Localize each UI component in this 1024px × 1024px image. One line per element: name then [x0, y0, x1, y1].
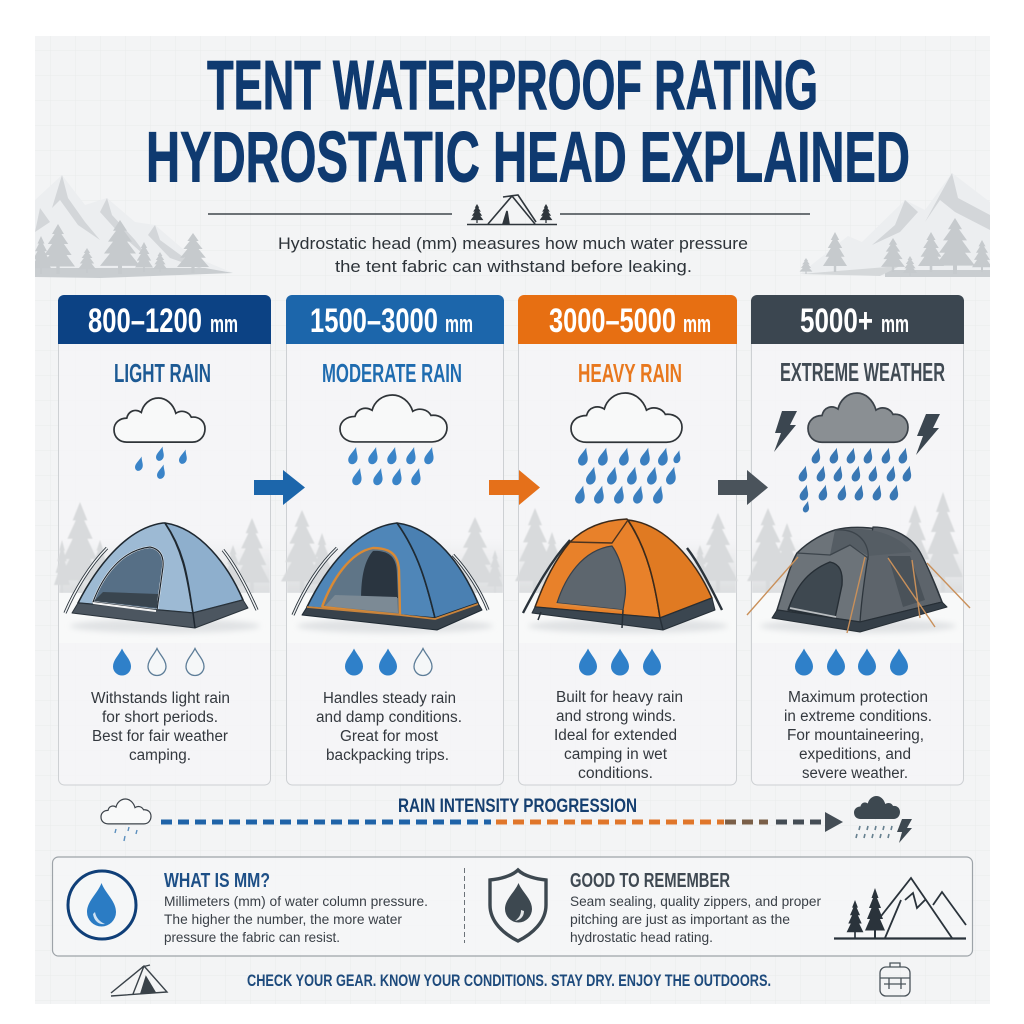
description: Best for fair weather: [92, 728, 228, 745]
background trees: [54, 502, 270, 594]
icon: light rain drops: [135, 446, 187, 479]
description: severe weather.: [802, 765, 908, 782]
arrow: blue: [254, 470, 305, 505]
tent: blue: [293, 523, 488, 630]
icon: backpack: [880, 963, 910, 996]
icon: water drop in circle: [68, 871, 136, 939]
tent: grey expedition: [747, 527, 970, 633]
heading: progression: RAIN INTENSITY PROGRESSION: [398, 796, 637, 817]
panel: heavy rain: [515, 295, 738, 785]
description: For mountaineering,: [787, 727, 924, 744]
description: camping in wet: [564, 746, 668, 763]
header: 800-1200 mm: mm: [210, 311, 238, 338]
background trees: [515, 508, 738, 594]
ground shadow: [760, 619, 956, 633]
heading: light rain: LIGHT RAIN: [114, 358, 211, 388]
arrow: grey: [718, 470, 768, 505]
info panel: [52, 857, 972, 956]
ground shadow: [70, 619, 260, 633]
icon: mountains and trees: [834, 878, 966, 938]
background trees: [747, 492, 963, 594]
section: what is mm: Millimeters (mm) of water column pressure.: [164, 893, 428, 909]
section: good to remember: hydrostatic head rating.: [570, 929, 713, 945]
snowy ground: [287, 593, 503, 643]
icon: lightning right: [916, 414, 940, 455]
header: 1500-3000 mm: 1500–3000: [310, 302, 438, 340]
description: [316, 690, 462, 764]
heading: heavy rain: HEAVY RAIN: [578, 358, 682, 388]
rating: four drops: [795, 648, 908, 676]
icon: small tent with trees: [467, 195, 557, 224]
header: 1500-3000 mm: mm: [445, 311, 473, 338]
icon: storm cloud with heavy rain: [854, 796, 912, 843]
icon: outline cloud: [571, 393, 682, 442]
icon: storm cloud: [808, 393, 908, 442]
header: 5000+ mm: [751, 295, 964, 344]
icon: extreme rain drops: [799, 448, 911, 512]
section: what is mm: [164, 870, 428, 945]
header: 1500-3000 mm: [286, 295, 504, 344]
subtitle: Hydrostatic head (mm) measures how much water pressure: [278, 234, 748, 253]
heading: moderate rain: MODERATE RAIN: [322, 358, 462, 388]
header: 3000-5000 mm: 3000–5000: [549, 302, 676, 340]
description: and strong winds.: [556, 708, 676, 725]
header: 3000-5000 mm: [518, 295, 737, 344]
divider with tent icon: [208, 195, 810, 224]
description: [554, 689, 683, 782]
icon: outline cloud: [340, 395, 447, 442]
section: good to remember: Seam sealing, quality zippers, and proper: [570, 893, 821, 909]
icon: small cloud with light rain: [101, 799, 151, 841]
description: backpacking trips.: [326, 747, 449, 764]
description: and damp conditions.: [316, 709, 462, 726]
subtitle: the tent fabric can withstand before leaking.: [335, 257, 692, 276]
panel: moderate rain: [281, 295, 504, 785]
rain intensity progression: [101, 796, 912, 843]
description: Built for heavy rain: [556, 689, 683, 706]
description: camping.: [129, 747, 191, 764]
description: Great for most: [340, 728, 439, 745]
section: what is mm: The higher the number, the more water: [164, 911, 402, 927]
description: Withstands light rain: [91, 690, 230, 707]
header: 3000-5000 mm: mm: [683, 311, 711, 338]
panel: extreme weather: [747, 295, 970, 785]
header: 5000+ mm: 5000+: [800, 302, 873, 340]
rating: two of three drops: [345, 648, 432, 676]
icon: moderate rain drops: [348, 447, 434, 485]
description: Handles steady rain: [323, 690, 456, 707]
description: Maximum protection: [788, 689, 928, 706]
description: [784, 689, 932, 782]
snowy ground: [752, 593, 963, 643]
section: what is mm: WHAT IS MM?: [164, 870, 270, 892]
description: Ideal for extended: [554, 727, 677, 744]
footer: [111, 963, 910, 996]
header: 800-1200 mm: [58, 295, 271, 344]
closing message: CHECK YOUR GEAR. KNOW YOUR CONDITIONS. STAY DRY. ENJOY THE OUTDOORS.: [247, 971, 771, 990]
section: good to remember: pitching are just as important as the: [570, 911, 790, 927]
snowy ground: [519, 593, 736, 643]
section: good to remember: GOOD TO REMEMBER: [570, 870, 730, 892]
section: what is mm: pressure the fabric can resist.: [164, 929, 340, 945]
illustration: right mountains: [800, 173, 992, 277]
description: conditions.: [578, 765, 653, 782]
rating: three drops: [579, 648, 661, 676]
description: [91, 690, 230, 764]
title: [146, 46, 910, 198]
panel: light rain: [54, 295, 271, 785]
snowy ground: [59, 593, 270, 643]
tent: light blue: [65, 523, 257, 628]
arrow: orange: [489, 470, 540, 505]
rating: one of three drops: [113, 648, 204, 676]
icon: lightning left: [774, 411, 797, 452]
illustration: left mountains: [31, 175, 233, 278]
dashed progression line: [161, 812, 843, 832]
background trees: [281, 510, 503, 594]
section: good to remember: [570, 870, 821, 945]
description: for short periods.: [102, 709, 218, 726]
icon: heavy rain drops: [575, 448, 680, 504]
icon: shield with drop: [490, 870, 546, 941]
header: 800-1200 mm: 800–1200: [88, 302, 202, 340]
icon: footer tent: [111, 965, 167, 996]
tent: orange: [523, 519, 722, 630]
header: 5000+ mm: mm: [881, 311, 909, 338]
subtitle: [278, 234, 748, 276]
ground shadow: [297, 619, 493, 633]
dashed divider: [464, 868, 466, 943]
description: expeditions, and: [799, 746, 911, 763]
icon: outline cloud: [114, 398, 205, 442]
ground shadow: [528, 619, 728, 633]
description: in extreme conditions.: [784, 708, 932, 725]
